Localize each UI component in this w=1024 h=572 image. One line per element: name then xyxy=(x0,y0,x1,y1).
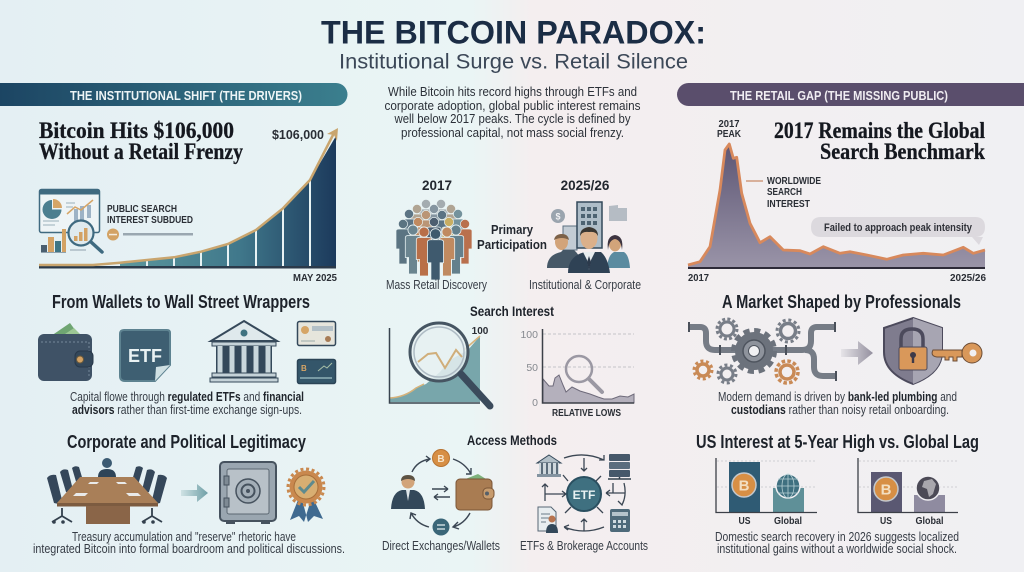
axis label: 2025/26: 2025/26 xyxy=(950,272,986,284)
text: treasury accumulation: integrated Bitcoin into formal boardroom and political discussions. xyxy=(33,541,345,556)
labels: us and global xyxy=(738,515,944,527)
chart: us vs global right: B xyxy=(881,482,892,498)
text: modern demand: custodians rather than noisy retail onboarding. xyxy=(731,402,949,417)
diagram: etf and brokerage network xyxy=(537,454,631,533)
label: institutional and corporate: Institutional & Corporate xyxy=(529,277,641,292)
chart: us vs global left: B xyxy=(739,478,750,494)
icon: bank xyxy=(210,321,278,382)
intro text: professional capital, not mass social frenzy. xyxy=(401,125,624,140)
text: modern demand xyxy=(718,389,957,417)
label: 2017 peak: 2017 xyxy=(718,118,740,130)
text: primary participation: Primary xyxy=(491,222,534,237)
callout: failed to approach peak: Failed to approach peak intensity xyxy=(824,222,973,234)
intro text xyxy=(384,84,641,140)
callout: public search interest xyxy=(107,203,193,240)
text: treasury accumulation xyxy=(33,529,345,556)
diagram: direct exchanges and wallets xyxy=(391,450,494,536)
title: THE BITCOIN PARADOX: xyxy=(321,14,706,50)
text: modern demand: Modern demand is driven by bank-led plumbing and xyxy=(718,389,957,404)
icon: cards xyxy=(298,322,336,384)
headline: bitcoin hits 106000: Without a Retail Frenzy xyxy=(39,139,243,164)
heading: search interest: Search Interest xyxy=(470,303,554,319)
headline: 2017 benchmark xyxy=(774,118,985,164)
labels: us and global: Global xyxy=(774,515,802,527)
heading: access methods: Access Methods xyxy=(467,432,557,448)
label: 2025/26: 2025/26 xyxy=(561,178,610,193)
heading: corporate legitimacy: Corporate and Political Legitimacy xyxy=(67,432,306,452)
text: capital flows xyxy=(70,389,304,417)
text: primary participation: Participation xyxy=(477,237,547,252)
heading: market shaped by professionals: A Market Shaped by Professionals xyxy=(722,292,961,312)
panel: institutional shift xyxy=(0,83,347,556)
chart: us vs global right xyxy=(858,458,958,512)
diagram: direct exchanges and wallets: B xyxy=(437,454,445,465)
text: primary participation xyxy=(477,222,547,252)
callout: failed to approach peak xyxy=(811,217,985,245)
headline: bitcoin hits 106000 xyxy=(39,118,243,164)
intro text: well below 2017 peaks. The cycle is defined by xyxy=(394,111,631,126)
chart: 2025 search interest relative lows: 50 xyxy=(526,362,538,374)
text: capital flows: advisors rather than first-time exchange sign-ups. xyxy=(72,402,302,417)
icon: institutional executives xyxy=(547,202,630,273)
label: 2017 peak xyxy=(717,118,741,140)
left header pill xyxy=(0,83,347,106)
callout: public search interest: PUBLIC SEARCH xyxy=(107,203,177,215)
headline: 2017 benchmark: 2017 Remains the Global xyxy=(774,118,985,143)
icon: wallet xyxy=(38,323,93,381)
panel: center comparison xyxy=(382,178,648,553)
intro text: While Bitcoin hits record highs through ETFs and xyxy=(388,84,637,99)
text: domestic search recovery: institutional gains without a worldwide social shock. xyxy=(717,541,957,556)
label: 106000: $106,000 xyxy=(272,128,324,142)
label: mass retail discovery: Mass Retail Discovery xyxy=(386,277,487,292)
chart: 2017 search interest with magnifier: 100 xyxy=(472,326,489,337)
left header pill: THE INSTITUTIONAL SHIFT (THE DRIVERS) xyxy=(70,88,302,103)
headline: 2017 benchmark: Search Benchmark xyxy=(820,139,985,164)
icon: award badge xyxy=(288,469,324,522)
headline: bitcoin hits 106000: Bitcoin Hits $106,000 xyxy=(39,118,234,143)
labels: us and global: US xyxy=(880,515,892,527)
arrow: pipes to shield xyxy=(841,341,873,365)
diagram: etf and brokerage network: ETF xyxy=(573,488,595,502)
label: direct exchanges wallets: Direct Exchanges/Wallets xyxy=(382,538,500,553)
label: 2017: 2017 xyxy=(422,178,452,193)
label: relative lows: RELATIVE LOWS xyxy=(552,407,621,419)
callout: worldwide search interest: INTEREST xyxy=(767,198,810,210)
chart: 2025 search interest relative lows: 0 xyxy=(532,397,538,409)
text: treasury accumulation: Treasury accumulation and "reserve" rhetoric have xyxy=(72,529,296,544)
label: 2017 peak: PEAK xyxy=(717,128,741,140)
chart: us vs global left xyxy=(716,458,817,512)
chart: 2025 search interest relative lows: 100 xyxy=(520,329,538,341)
icon: pipes and gears xyxy=(689,319,836,383)
label: etfs and brokerage accounts: ETFs & Brokerage Accounts xyxy=(520,538,648,553)
right header pill: THE RETAIL GAP (THE MISSING PUBLIC) xyxy=(730,88,948,103)
intro text: corporate adoption, global public interest remains xyxy=(384,98,641,113)
right header pill xyxy=(677,83,1024,106)
icon: etf document: ETF xyxy=(128,346,162,366)
icon: boardroom table xyxy=(47,458,167,524)
text: domestic search recovery: Domestic search recovery in 2026 suggests localized xyxy=(715,529,959,544)
icon: retail crowd xyxy=(396,199,472,280)
chart: price growth bars xyxy=(39,128,338,268)
text: domestic search recovery xyxy=(715,529,959,556)
subtitle: Institutional Surge vs. Retail Silence xyxy=(339,50,688,74)
icon: shield and key xyxy=(884,318,982,384)
callout: worldwide search interest: WORLDWIDE xyxy=(767,175,821,187)
labels: us and global: US xyxy=(738,515,750,527)
labels: us and global: Global xyxy=(916,515,944,527)
arrow: boardroom to safe xyxy=(181,484,208,502)
icon: cards: B xyxy=(301,364,307,373)
icon: dashboard with magnifier xyxy=(40,190,102,252)
axis label: 2017: 2017 xyxy=(688,272,709,284)
icon: etf document xyxy=(120,330,170,381)
callout: worldwide search interest: SEARCH xyxy=(767,186,802,198)
icon: institutional executives: $ xyxy=(555,212,561,222)
text: capital flows: Capital flowe through regulated ETFs and financial xyxy=(70,389,304,404)
chart: worldwide search interest xyxy=(688,144,985,269)
label: may 2025: MAY 2025 xyxy=(293,272,337,284)
callout: worldwide search interest xyxy=(746,175,821,210)
panel: retail gap xyxy=(677,83,1024,556)
chart: 2025 search interest relative lows xyxy=(520,329,634,409)
chart: 2017 search interest with magnifier xyxy=(390,323,490,406)
icon: safe xyxy=(220,462,276,524)
callout: public search interest: INTEREST SUBDUED xyxy=(107,214,193,226)
heading: wallets to wrappers: From Wallets to Wall Street Wrappers xyxy=(52,292,310,312)
